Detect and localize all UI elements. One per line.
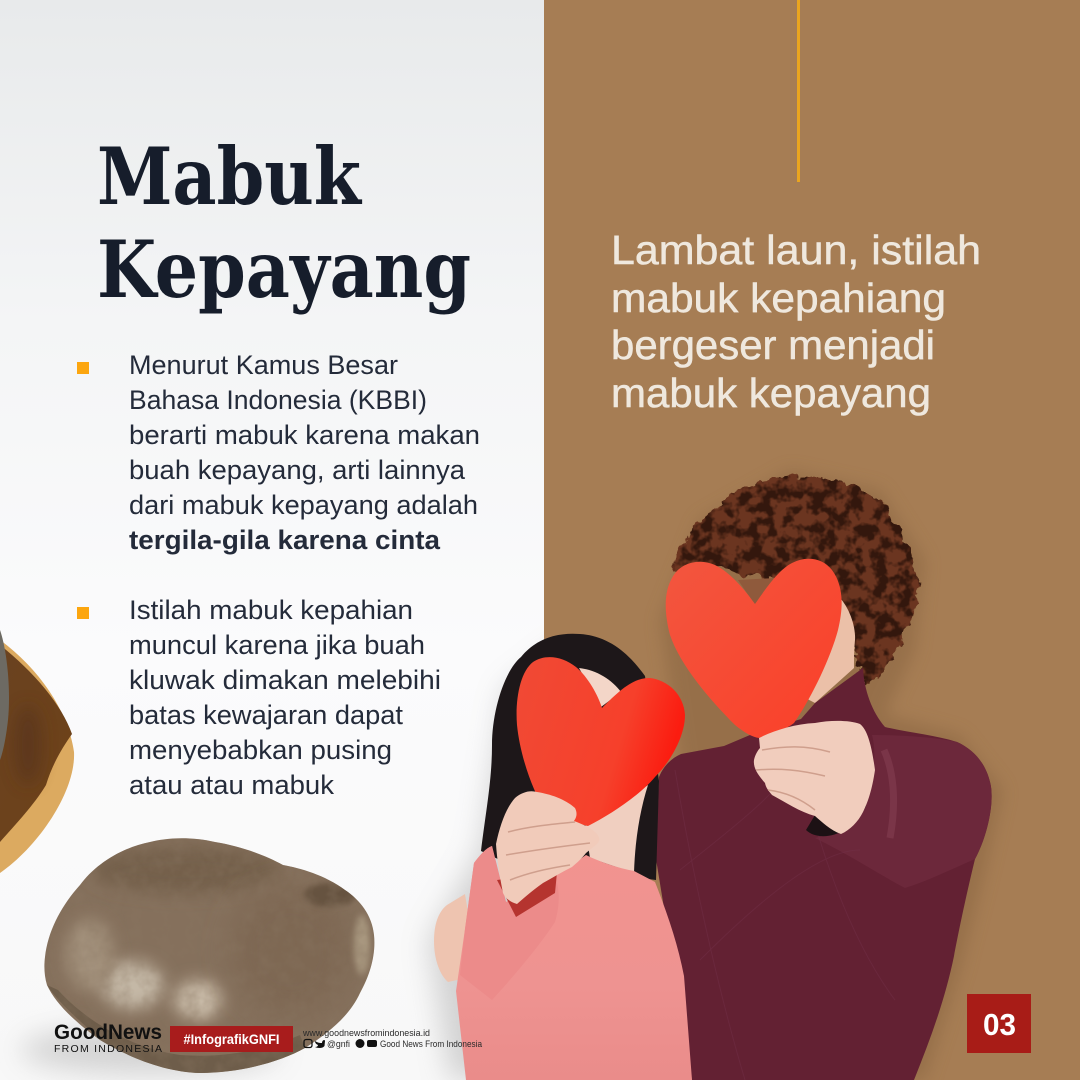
- man forehead in heart notch: [738, 578, 775, 605]
- right panel statement: Lambat laun, istilah: [611, 227, 981, 273]
- illustration: wooden bowl with kluwak: [0, 630, 74, 873]
- bullet text block 2: kluwak dimakan melebihi: [129, 665, 441, 695]
- man hand: [754, 721, 875, 834]
- bullet text block 1: Bahasa Indonesia (KBBI): [129, 385, 427, 415]
- bullet text block 2: Istilah mabuk kepahian: [129, 595, 413, 625]
- bullet text block 1: [77, 350, 480, 555]
- footer: GoodNews logo: GoodNews: [54, 1021, 162, 1044]
- title: Kepayang: [97, 223, 471, 316]
- footer: website and social handles: @gnfi: [327, 1039, 350, 1050]
- bullet text block 1: tergila-gila karena cinta: [129, 525, 441, 555]
- bullet text block 2: [77, 595, 441, 800]
- right panel statement: mabuk kepahiang: [611, 275, 946, 321]
- right panel statement: [611, 227, 981, 416]
- man sweater: [656, 668, 992, 1080]
- bullet text block 1: dari mabuk kepayang adalah: [129, 490, 478, 520]
- woman heart: [517, 657, 685, 826]
- woman forehead skin: [579, 668, 621, 707]
- woman hair: [481, 634, 659, 880]
- man cuff: [806, 790, 866, 836]
- soft shadow around couple: [420, 677, 508, 1080]
- footer: website and social handles: Good News From Indonesia: [380, 1039, 483, 1050]
- title: Mabuk: [97, 130, 363, 223]
- woman sleeve cuff: [497, 872, 557, 917]
- footer: hashtag tag: [170, 1026, 293, 1052]
- man neck: [790, 596, 855, 703]
- background: left white panel: [0, 0, 544, 1080]
- footer: hashtag tag: #InfografikGNFI: [184, 1032, 280, 1047]
- man curly hair: [672, 476, 918, 684]
- man hand on woman arm: [434, 894, 476, 982]
- man sweater seams: [675, 760, 895, 1080]
- icon: instagram: [304, 1040, 312, 1048]
- icon: youtube: [367, 1040, 377, 1047]
- illustration: couple holding paper hearts: [428, 470, 1003, 1080]
- man shadow on brown panel: [660, 470, 1003, 1080]
- bullet text block 2: menyebabkan pusing: [129, 735, 392, 765]
- right panel statement: mabuk kepayang: [611, 370, 931, 416]
- man heart: [666, 559, 842, 738]
- bullet text block 1: berarti mabuk karena makan: [129, 420, 480, 450]
- bullet text block 2: batas kewajaran dapat: [129, 700, 404, 730]
- bullet text block 2: muncul karena jika buah: [129, 630, 425, 660]
- woman hand: [496, 791, 599, 904]
- woman pink sweater: [456, 846, 692, 1080]
- woman sleeve: [460, 846, 559, 1000]
- bullet text block 2: atau atau mabuk: [129, 770, 334, 800]
- footer: GoodNews logo: [54, 1021, 162, 1055]
- panel: brown right panel: [544, 0, 1080, 1080]
- right panel statement: bergeser menjadi: [611, 322, 935, 368]
- footer: website and social handles: www.goodnewsfromindonesia.id: [302, 1028, 430, 1039]
- bullet text block 1: Menurut Kamus Besar: [129, 350, 398, 380]
- icon: facebook: [356, 1039, 364, 1048]
- footer: GoodNews logo: FROM INDONESIA: [54, 1043, 162, 1055]
- man sleeve: [815, 735, 992, 888]
- footer: website and social handles: [302, 1028, 483, 1050]
- orange vertical line: [797, 0, 800, 182]
- woman neck: [585, 785, 648, 873]
- page number badge: [967, 994, 1031, 1053]
- title: [97, 130, 471, 316]
- icon: twitter: [315, 1040, 325, 1048]
- page number badge: 03: [983, 1007, 1016, 1042]
- bullet text block 1: buah kepayang, arti lainnya: [129, 455, 466, 485]
- illustration: kluwak fruit: [20, 835, 380, 1075]
